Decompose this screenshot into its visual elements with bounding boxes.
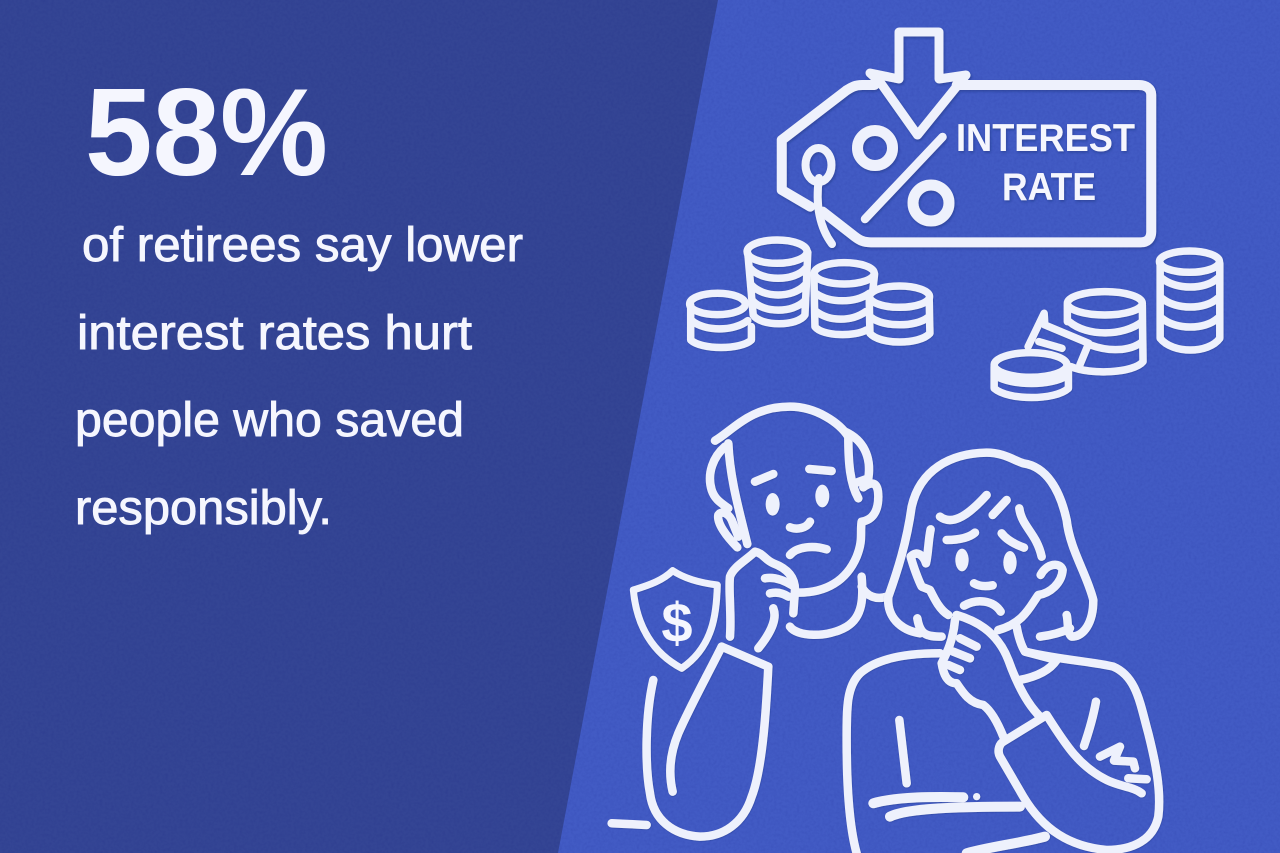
text block: statistic description: of retirees say lower [82, 219, 523, 272]
icon: dollar sign on shield: $ [661, 591, 693, 654]
icon: left coin stacks [690, 240, 930, 347]
icon: worried older woman [847, 453, 1159, 853]
woman left shoulder and creases [847, 653, 940, 853]
woman face [947, 533, 1024, 612]
text block: statistic description: responsibly. [75, 482, 332, 535]
icon: right coin stacks [994, 251, 1220, 398]
percent symbol [858, 130, 949, 221]
woman neck and body [1017, 627, 1057, 680]
shield outline [633, 571, 717, 668]
price tag outline [782, 85, 1151, 242]
text block: statistic description: interest rates hurt [77, 307, 472, 360]
heading: 58% statistic: 58% [85, 64, 328, 202]
icon: worried older man with shield [612, 407, 887, 837]
man collar [790, 577, 887, 635]
panel: left dark diagonal background [0, 0, 718, 853]
tag label: interest rate: RATE [1002, 166, 1096, 209]
woman hair [888, 453, 1093, 637]
man arm [647, 647, 768, 837]
man face [755, 469, 832, 555]
text block: statistic description: people who saved [75, 394, 464, 447]
man head and hair [715, 407, 858, 498]
tag hole and string [806, 148, 832, 244]
tag label: interest rate: INTEREST [956, 117, 1135, 160]
man hand [730, 552, 795, 637]
text block: statistic description [75, 219, 523, 535]
down arrow [870, 32, 966, 135]
icon: interest rate price tag with down arrow [782, 32, 1151, 244]
woman hand [942, 615, 1040, 737]
tag label: interest rate [956, 117, 1135, 209]
